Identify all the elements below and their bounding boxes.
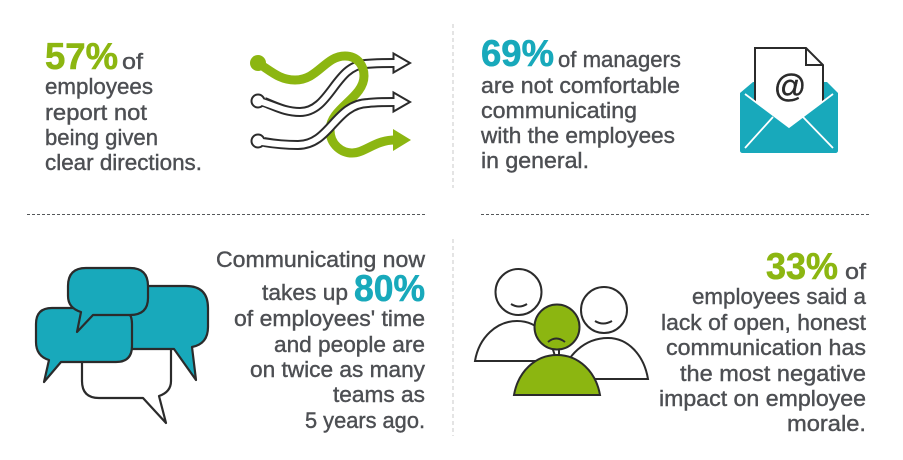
text block: 57% of employees: report not bbox=[45, 100, 147, 125]
person: right bbox=[561, 287, 648, 379]
text block: 57% of employees: of bbox=[122, 49, 144, 74]
stat: 69%: 69% bbox=[481, 33, 554, 74]
text block: 57% of employees: clear directions. bbox=[45, 150, 202, 175]
text block: 80% of time: of employees' time bbox=[234, 306, 425, 331]
text block: 80% of time: Communicating now bbox=[216, 247, 425, 272]
text block: 33% of employees: the most negative bbox=[680, 361, 866, 386]
top teal bubble bbox=[68, 268, 148, 332]
right teal bubble bbox=[130, 286, 208, 380]
icon: speech bubbles bbox=[36, 268, 208, 423]
text block: 80% of time: teams as bbox=[333, 382, 425, 407]
arrow: bottom white bbox=[252, 92, 410, 148]
person: green bbox=[514, 304, 600, 395]
stat: 33%: 33% bbox=[766, 246, 838, 287]
icon: group of people bbox=[475, 269, 648, 395]
stat: 57%: 57% bbox=[45, 36, 118, 77]
text block: 33% of employees: morale. bbox=[787, 411, 866, 436]
text block: 33% of employees: communication has bbox=[666, 335, 866, 360]
text block: 80% of time: and people are bbox=[274, 332, 425, 357]
text block: 69% of managers: communicating bbox=[481, 98, 637, 123]
icon: email envelope bbox=[740, 48, 838, 153]
white bubble bbox=[82, 345, 171, 423]
text block: 57% of employees: employees bbox=[45, 74, 153, 99]
text block: 80% of time: 5 years ago. bbox=[305, 408, 425, 433]
left teal bubble bbox=[36, 308, 132, 382]
text block: 33% of employees: impact on employee bbox=[659, 386, 866, 411]
envelope back bbox=[740, 82, 838, 153]
text block: 80% of time: takes up bbox=[262, 280, 348, 305]
stat: 80%: 80% bbox=[354, 268, 425, 309]
text block: 33% of employees bbox=[659, 246, 867, 436]
text block: 69% of managers: in general. bbox=[481, 148, 589, 173]
person: left bbox=[475, 269, 556, 361]
arrow: middle white bbox=[252, 54, 410, 112]
arrow: green path bbox=[250, 55, 411, 153]
paper bbox=[755, 48, 823, 127]
text block: 69% of managers: with the employees bbox=[480, 123, 675, 148]
text block: 33% of employees: of bbox=[845, 259, 867, 284]
text block: 57% of employees bbox=[45, 36, 202, 175]
text block: 33% of employees: employees said a bbox=[692, 284, 867, 309]
envelope front bbox=[740, 93, 838, 153]
text block: 69% of managers: of managers bbox=[558, 47, 681, 72]
text block: 80% of time: on twice as many bbox=[250, 357, 425, 382]
icon: crossing arrows bbox=[250, 54, 411, 153]
text block: 33% of employees: lack of open, honest bbox=[661, 310, 866, 335]
at sign: @ bbox=[774, 68, 806, 104]
text block: 69% of managers bbox=[480, 33, 681, 173]
text block: 80% of time bbox=[216, 247, 425, 433]
text block: 57% of employees: being given bbox=[45, 125, 158, 150]
text block: 69% of managers: are not comfortable bbox=[481, 73, 680, 98]
